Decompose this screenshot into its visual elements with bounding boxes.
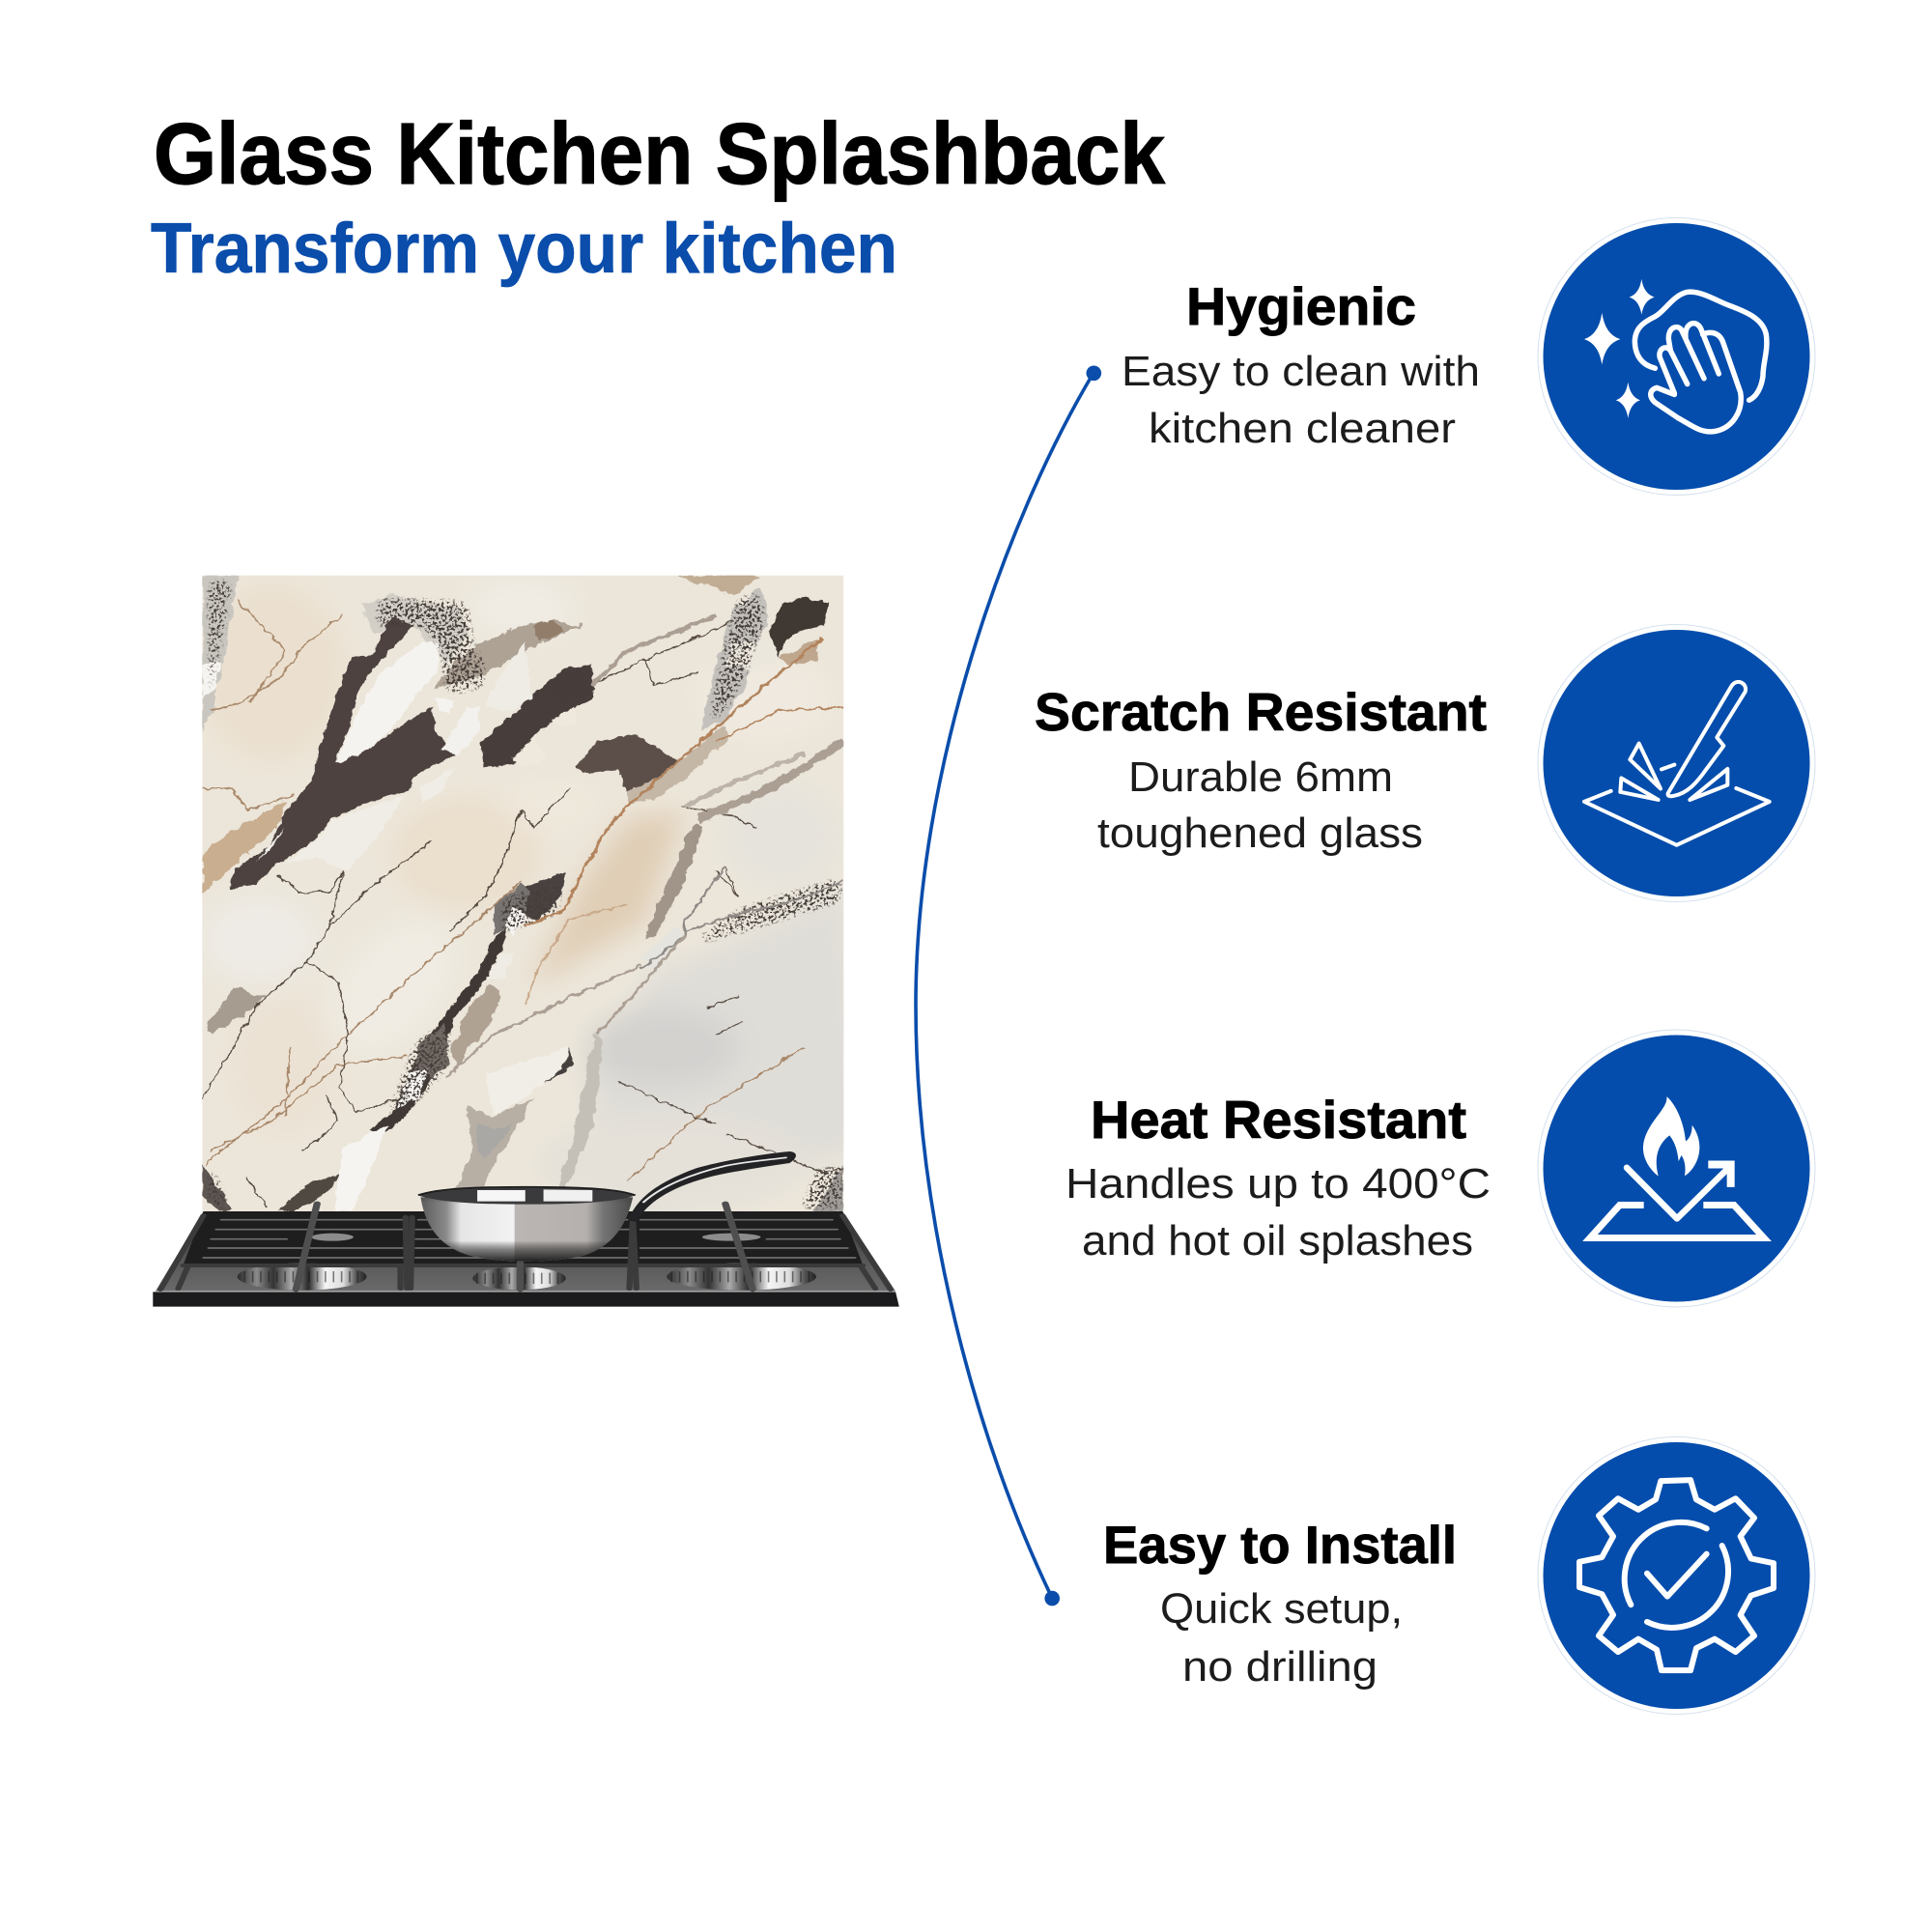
pan rim [418, 1187, 636, 1205]
feature: Easy to Install: Quick setup, [1160, 1585, 1403, 1633]
pan bowl [420, 1197, 633, 1262]
feature: Heat Resistant: Handles up to 400°C [1065, 1160, 1491, 1208]
feature: Scratch Resistant: Scratch Resistant [1035, 682, 1487, 742]
white inclusions [336, 640, 440, 763]
connector curve [916, 365, 1101, 1605]
marble grain [192, 569, 853, 1220]
feature: Heat Resistant: Heat Resistant [1091, 1090, 1466, 1150]
burners [238, 1234, 816, 1291]
pan handle [628, 1151, 796, 1222]
marble veins [202, 599, 843, 1208]
dark veins [230, 616, 456, 890]
subtitle: Transform your kitchen [151, 210, 897, 288]
feature: Easy to Install: Easy to Install [1103, 1515, 1457, 1575]
icon: knife on glass [1538, 624, 1815, 902]
feature: Heat Resistant [1065, 1090, 1491, 1264]
feature: Hygienic: Hygienic [1186, 276, 1416, 336]
feature: Hygienic [1122, 276, 1480, 452]
title: Glass Kitchen Splashback [154, 106, 1166, 203]
feature: Scratch Resistant [1035, 682, 1487, 857]
feature: Scratch Resistant: toughened glass [1097, 810, 1423, 857]
product image: gas hob with pan [153, 1151, 899, 1307]
icon: gear with check mark [1538, 1437, 1815, 1714]
feature: Hygienic: kitchen cleaner [1149, 405, 1456, 452]
icon: cleaning hand [1538, 218, 1815, 495]
icon: flame on glass [1538, 1030, 1815, 1307]
dark grate backing [184, 1211, 863, 1264]
product image: marble splashback [192, 569, 871, 1233]
feature: Heat Resistant: and hot oil splashes [1082, 1217, 1473, 1264]
feature: Easy to Install: no drilling [1182, 1643, 1378, 1690]
feature: Easy to Install [1103, 1515, 1457, 1690]
feature: Hygienic: Easy to clean with [1122, 348, 1480, 395]
hob front edge [153, 1292, 899, 1307]
grates [160, 1204, 891, 1290]
feature: Scratch Resistant: Durable 6mm [1128, 753, 1393, 801]
hob glass surface [156, 1211, 895, 1292]
